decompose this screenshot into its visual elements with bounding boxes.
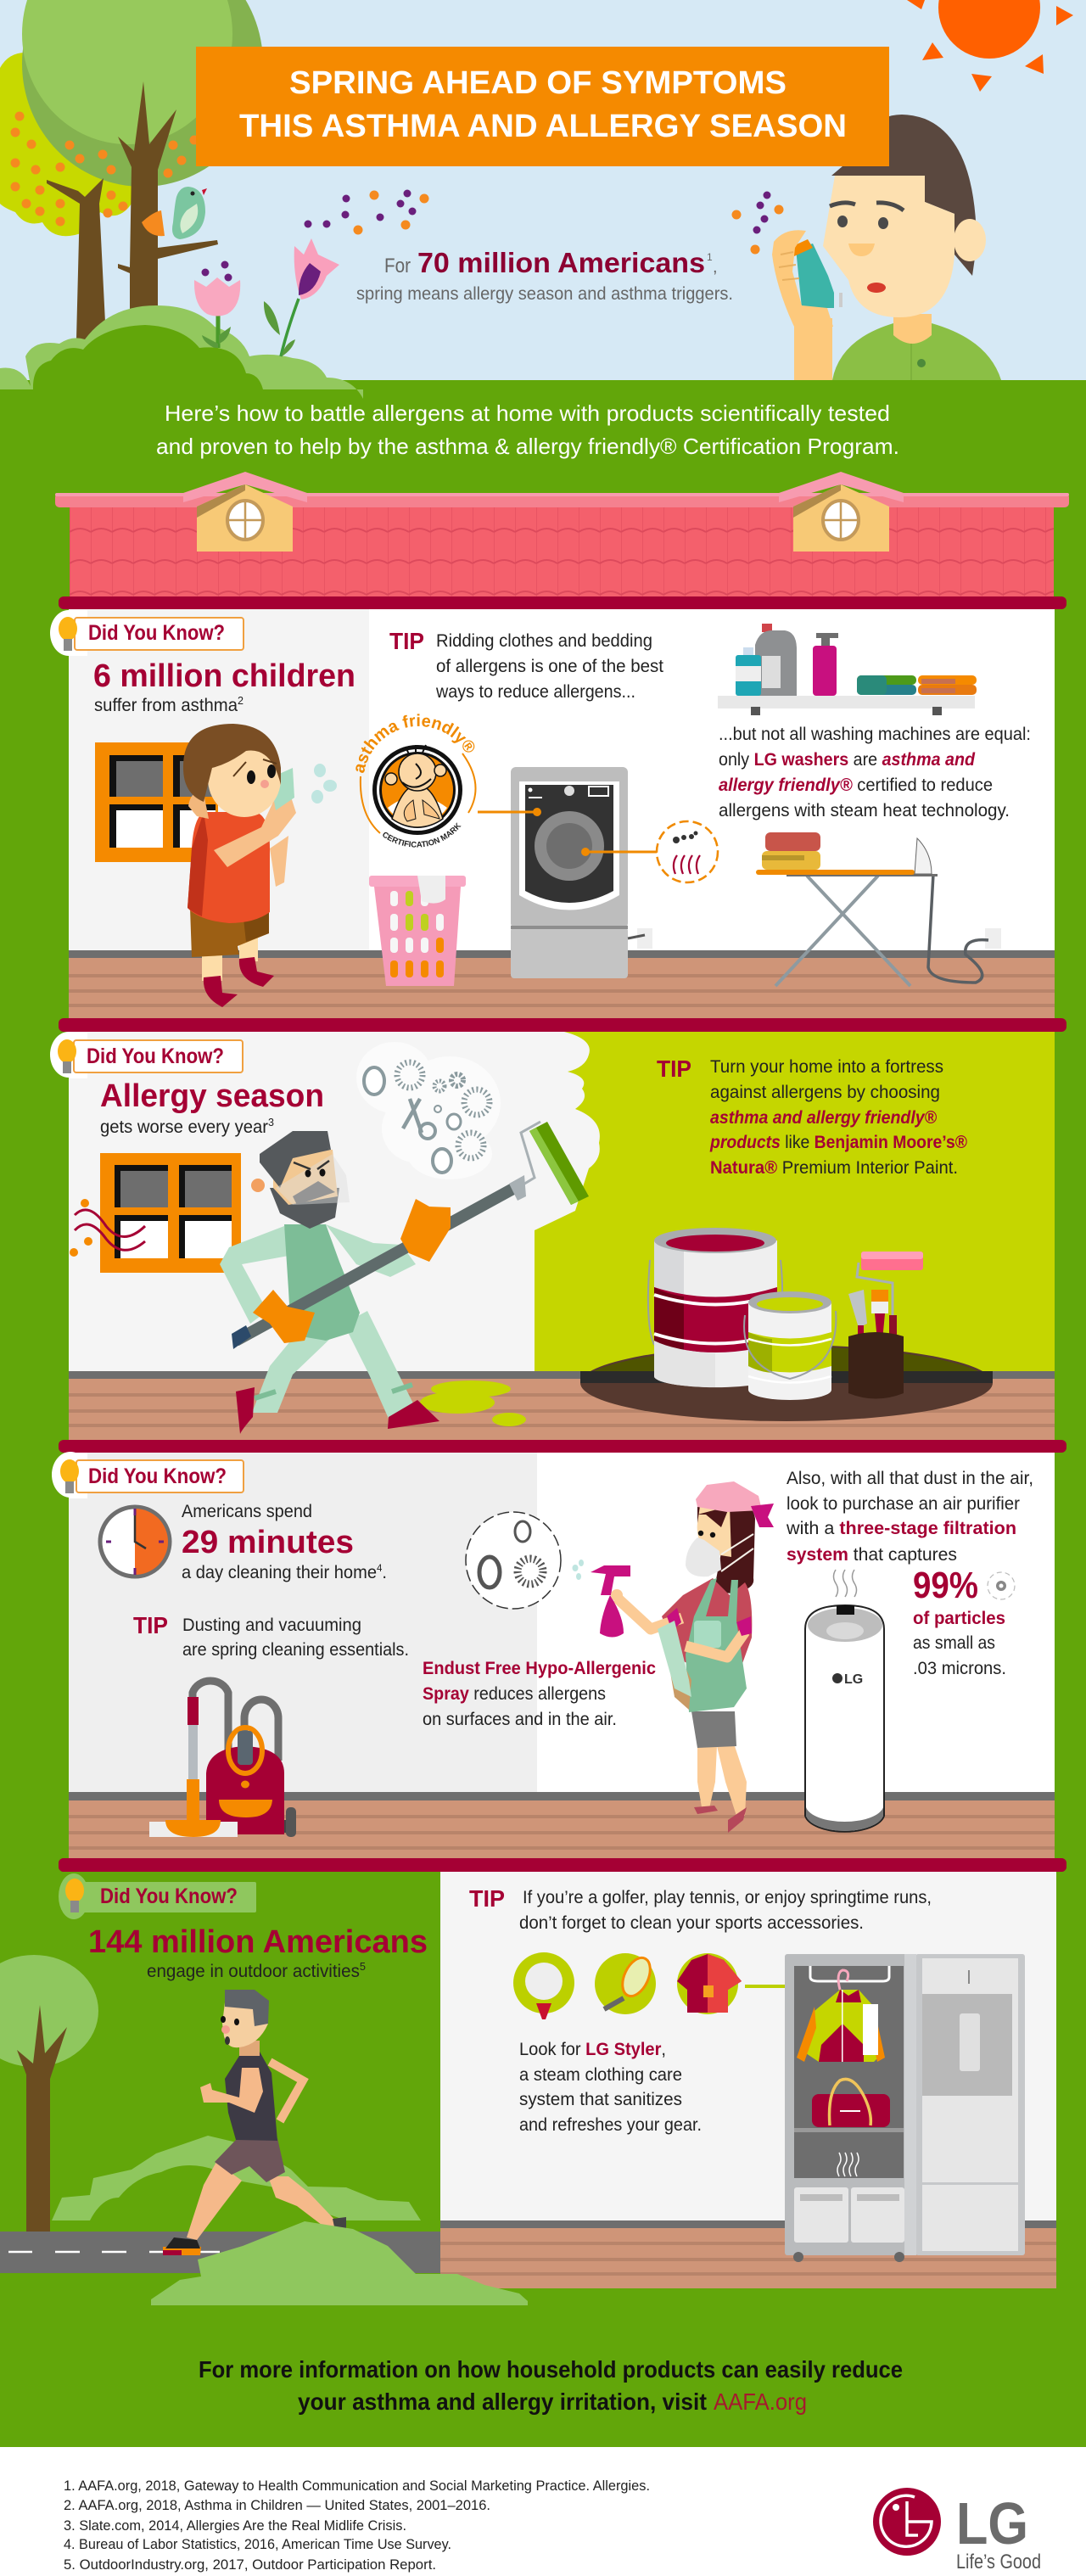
text: endust spray	[423, 1659, 656, 1729]
logo: asthma friendly certification mark	[355, 714, 477, 848]
flower: purple bloom	[264, 238, 339, 356]
illustration: painter with roller	[220, 1122, 589, 1434]
illustration: woman with spray and mask	[572, 1481, 774, 1833]
text: lg styler: system that sanitizes	[519, 2090, 682, 2109]
badge: did you know: Did You Know?	[87, 1044, 224, 1068]
icon: clock	[100, 1507, 170, 1576]
text: lg styler: Look for LG Styler,	[519, 2040, 666, 2059]
illustration: vacuum cleaner	[149, 1681, 296, 1837]
text: 70 million Americans	[356, 247, 733, 304]
text: endust spray: Endust Free Hypo-Allergenic	[423, 1659, 656, 1678]
illustration: tree	[0, 1955, 98, 2232]
text: tip on bedding: ways to reduce allergens...	[435, 682, 635, 702]
illustration: runner	[163, 1990, 346, 2255]
illustration: window	[95, 742, 218, 862]
text: lg washers: allergens with steam heat technology.	[719, 801, 1010, 820]
bush: behind runner	[52, 2136, 421, 2220]
text: sports tip: TIP	[469, 1885, 505, 1912]
intro text: Here’s how to battle allergens at home with products scientifically tested	[165, 400, 890, 426]
text: lg styler: and refreshes your gear.	[519, 2115, 702, 2135]
icon: tennis racket	[595, 1953, 656, 2014]
text: lg washers: only LG washers are asthma and	[719, 750, 976, 770]
logo: asthma friendly certification mark: CERTIFICATION MARK	[383, 822, 462, 848]
icon: sports shirt	[677, 1953, 742, 2014]
flower: pink tulip	[194, 261, 240, 350]
badge: did you know	[50, 610, 244, 656]
title banner	[196, 47, 889, 166]
stat: allergy season	[100, 1078, 324, 1137]
bush: foreground	[151, 2221, 528, 2305]
illustration: trees with orange fruit	[0, 0, 263, 339]
text: tip on bedding: of allergens is one of the best	[436, 657, 663, 676]
stat: 99 percent: 99%	[913, 1565, 978, 1606]
intro text: and proven to help by the asthma & allergy friendly® Certification Program.	[156, 434, 899, 459]
text: lg styler: a steam clothing care	[519, 2065, 682, 2085]
badge: did you know	[59, 1873, 256, 1919]
closing call to action: AAFA.org	[714, 2388, 807, 2415]
illustration: lg washer	[478, 767, 658, 978]
stat: 6 million children	[93, 658, 355, 715]
stat: 144 million americans: engage in outdoor activities	[147, 1962, 364, 1981]
illustration: laundry basket	[369, 876, 466, 986]
text: air purifier: look to purchase an air purifier	[787, 1494, 1020, 1514]
stat: 6 million children: suffer from asthma	[94, 696, 243, 715]
text: 70 million Americans: spring means allergy season and asthma triggers.	[356, 284, 733, 304]
badge: did you know	[50, 1032, 243, 1078]
road	[0, 2232, 440, 2273]
text: lg washers: ...but not all washing machines are equal:	[719, 725, 1031, 744]
text: air purifier: with a three-stage filtration	[786, 1519, 1016, 1538]
badge: did you know: Did You Know?	[88, 1464, 227, 1488]
outlets and power cord	[628, 874, 1001, 983]
connector line	[745, 1982, 808, 1991]
references list: 1. AAFA.org, 2018, Gateway to Health Communication and Social Marketing Practice. Allergies.	[64, 2478, 650, 2494]
pollen dots	[304, 190, 784, 255]
stat: 29 minutes	[182, 1502, 387, 1582]
stat: 99 percent: as small as	[913, 1633, 995, 1653]
text: paint tip: TIP	[657, 1056, 691, 1082]
stat: 144 million americans: 5	[360, 1960, 366, 1973]
text: lg washers	[719, 725, 1031, 820]
illustration: paint cans and brushes	[580, 1228, 993, 1421]
text: air purifier: Also, with all that dust in the air,	[787, 1469, 1033, 1488]
text: paint tip: products like Benjamin Moore’s®	[709, 1133, 967, 1152]
text: 70 million Americans: ,	[713, 258, 718, 277]
text: endust spray: Spray reduces allergens	[423, 1684, 606, 1704]
stat: 99 percent	[913, 1565, 1015, 1678]
stat: 29 minutes: 29 minutes	[182, 1525, 354, 1560]
logo: asthma friendly certification mark: asthma friendly®	[355, 714, 475, 773]
stat: 6 million children: 2	[238, 694, 244, 707]
text: air purifier: system that captures	[787, 1545, 957, 1565]
stat: 29 minutes: 4	[377, 1562, 383, 1574]
badge: did you know	[52, 1452, 244, 1498]
text: dusting tip	[133, 1612, 409, 1660]
text: paint tip: Natura® Premium Interior Paint.	[710, 1158, 958, 1178]
panel: section 4, outdoor activities	[0, 1858, 1066, 2305]
logo: lg: LG	[956, 2490, 1028, 2556]
text: paint tip: asthma and allergy friendly®	[710, 1108, 937, 1128]
house roof	[55, 472, 1069, 609]
title banner: THIS ASTHMA AND ALLERGY SEASON	[239, 109, 847, 144]
icon: steam circle	[657, 821, 718, 882]
illustration: lg styler	[785, 1954, 1025, 2262]
text: dusting tip: TIP	[133, 1612, 168, 1638]
badge: did you know: Did You Know?	[88, 621, 225, 645]
icon: bird on branch	[142, 187, 207, 239]
references list	[64, 2478, 650, 2573]
text: sports tip	[469, 1885, 932, 1933]
paint splat	[420, 1380, 526, 1426]
stat: 29 minutes: .	[382, 1563, 387, 1582]
stat: 99 percent: of particles	[913, 1609, 1005, 1628]
stat: 6 million children: 6 million children	[93, 658, 355, 694]
stat: allergy season: 3	[268, 1116, 274, 1128]
text: sports tip: If you’re a golfer, play tennis, or enjoy springtime runs,	[523, 1888, 932, 1907]
text: sports tip: don’t forget to clean your sports accessories.	[519, 1913, 864, 1933]
text: air purifier	[786, 1469, 1033, 1565]
references list: 5. OutdoorIndustry.org, 2017, Outdoor Participation Report.	[64, 2556, 436, 2573]
illustration: ironing board	[756, 832, 938, 986]
stat: allergy season: Allergy season	[100, 1078, 324, 1114]
references list: 2. AAFA.org, 2018, Asthma in Children — United States, 2001–2016.	[64, 2497, 490, 2513]
illustration: man with inhaler	[772, 115, 1001, 380]
text: paint tip: against allergens by choosing	[710, 1083, 940, 1102]
text: tip on bedding	[389, 628, 663, 702]
text: endust spray: on surfaces and in the air.	[423, 1710, 617, 1729]
title banner: SPRING AHEAD OF SYMPTOMS	[289, 65, 787, 101]
intro text	[156, 400, 899, 459]
panel: section 2, allergy season	[50, 1032, 1066, 1453]
stat: 144 million americans	[88, 1924, 428, 1981]
illustration: lg air purifier: LG	[844, 1672, 863, 1687]
illustration: lg air purifier	[805, 1570, 884, 1832]
closing call to action	[199, 2356, 903, 2415]
bush: foreground dark	[33, 325, 263, 389]
references list: 3. Slate.com, 2014, Allergies Are the Real Midlife Crisis.	[64, 2517, 406, 2534]
closing call to action: For more information on how household products can easily reduce	[199, 2356, 903, 2383]
text: dusting tip: are spring cleaning essentials.	[182, 1640, 409, 1660]
logo: lg: Life’s Good	[956, 2551, 1041, 2573]
text: 70 million Americans: 70 million Americans	[417, 247, 705, 278]
text: lg washers: allergy friendly® certified to reduce	[719, 776, 993, 795]
text: dusting tip: Dusting and vacuuming	[182, 1616, 361, 1635]
text: tip on bedding: TIP	[389, 628, 424, 654]
text: 70 million Americans: For	[384, 255, 411, 277]
text: tip on bedding: Ridding clothes and bedding	[436, 631, 652, 651]
icon: sun	[907, 0, 1073, 92]
closing call to action: your asthma and allergy irritation, visit	[298, 2388, 707, 2415]
text: 70 million Americans: 1	[707, 251, 713, 263]
stat: allergy season: gets worse every year	[100, 1117, 274, 1137]
bushes	[0, 305, 363, 399]
stat: 144 million americans: 144 million Americans	[88, 1924, 428, 1960]
stat: 29 minutes: Americans spend	[182, 1502, 312, 1521]
illustration: window with breeze	[70, 1153, 241, 1273]
stat: 29 minutes: a day cleaning their home	[182, 1563, 385, 1582]
stat: 99 percent: .03 microns.	[913, 1659, 1006, 1678]
panel: section 3, cleaning time	[52, 1452, 1066, 1872]
illustration: boy with inhaler	[183, 724, 337, 1007]
germ cloud	[356, 1042, 501, 1179]
badge: did you know: Did You Know?	[100, 1884, 238, 1908]
germ circle	[466, 1512, 561, 1609]
panel: section 1, asthma in children	[50, 609, 1066, 1032]
references list: 4. Bureau of Labor Statistics, 2016, American Time Use Survey.	[64, 2536, 451, 2552]
text: lg styler	[519, 2040, 702, 2135]
icon: golf ball	[513, 1952, 574, 2019]
illustration: laundry shelf	[718, 624, 977, 715]
text: paint tip: Turn your home into a fortress	[710, 1057, 943, 1077]
logo: lg	[873, 2488, 1041, 2573]
text: paint tip	[657, 1056, 967, 1178]
